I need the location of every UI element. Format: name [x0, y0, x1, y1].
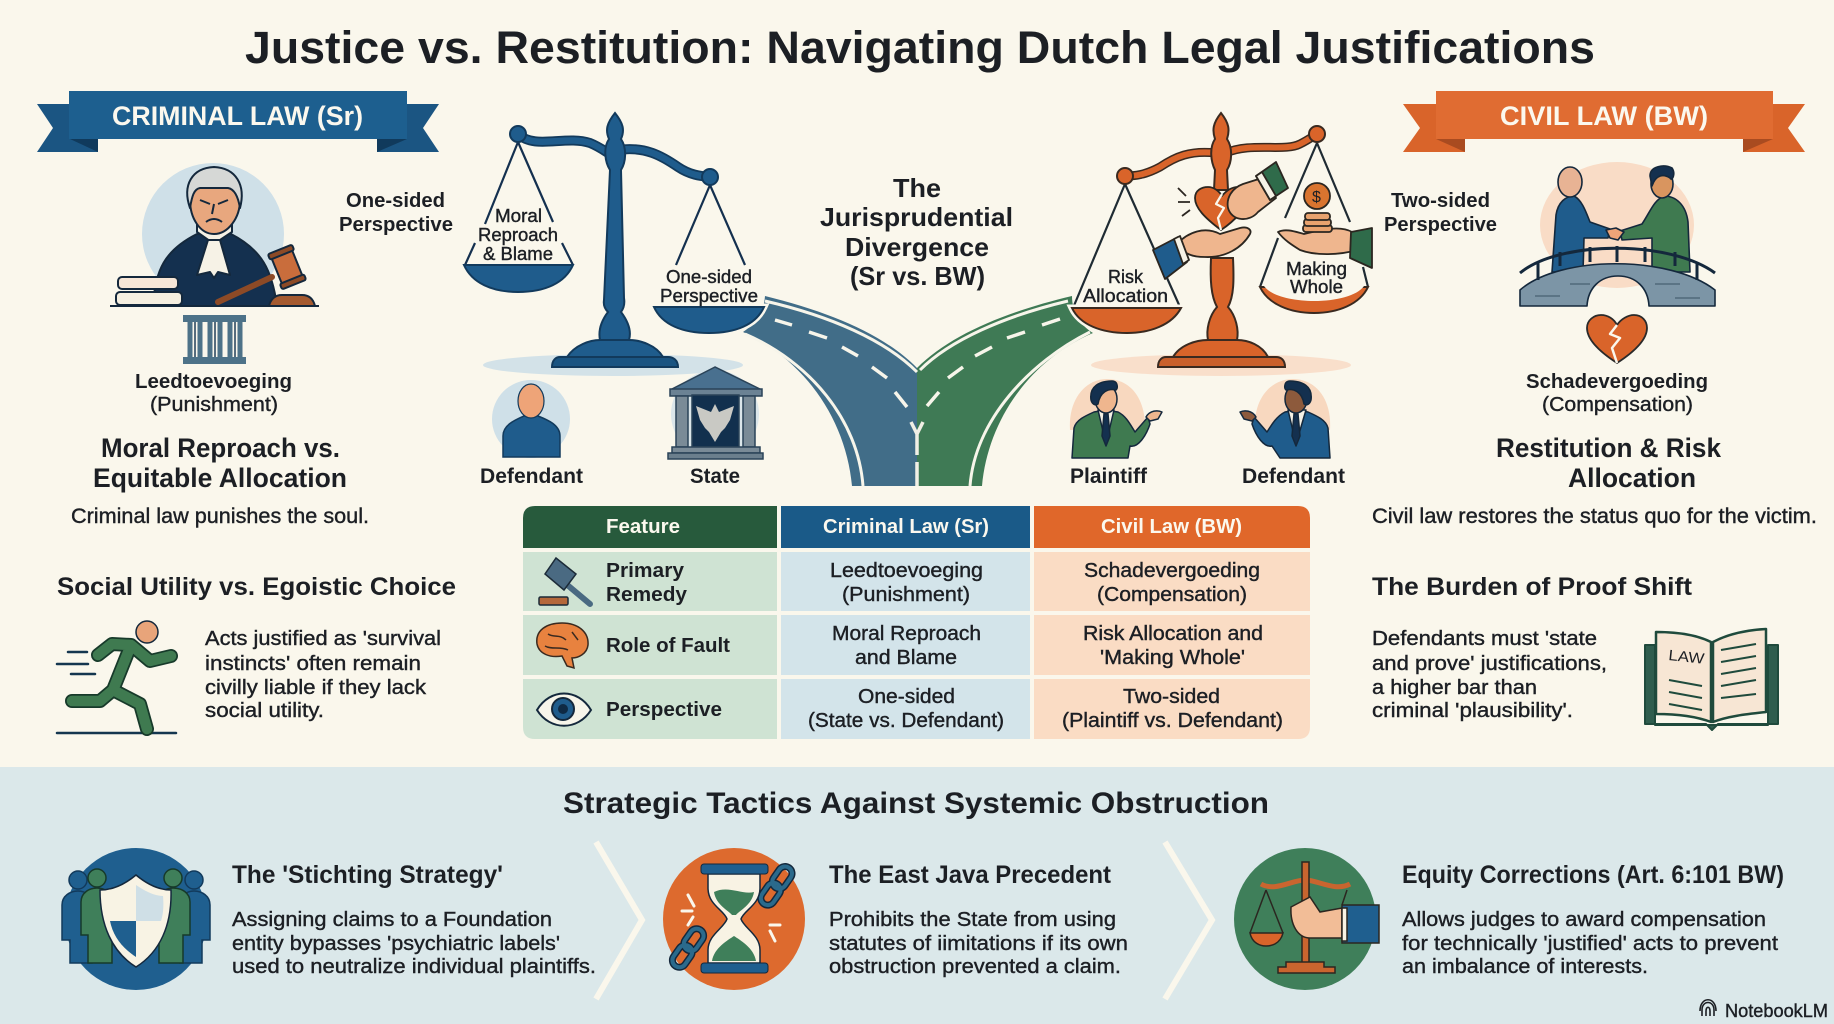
- table row: role of fault: [523, 615, 1310, 675]
- icon: handshake on bridge: [1520, 162, 1715, 306]
- label: Leedtoevoeging (Punishment): Leedtoevoeging: [135, 371, 292, 393]
- panel: criminal scale and parties: [464, 113, 764, 488]
- table row: perspective: Perspective: [606, 699, 722, 721]
- label: moral reproach and blame: Reproach: [478, 225, 558, 245]
- banner: criminal law: [37, 91, 439, 152]
- table header row: Feature: [606, 516, 680, 538]
- text: equity corrections: Equity Corrections (Art. 6:101 BW): [1402, 861, 1784, 889]
- text: survival instincts: instincts' often remain: [205, 653, 421, 675]
- text: stichting strategy: entity bypasses 'psychiatric labels': [232, 932, 560, 955]
- text: stichting strategy: used to neutralize individual plaintiffs.: [232, 955, 596, 978]
- icon: hands with broken heart and coins: [1153, 162, 1372, 279]
- text: stichting strategy: The 'Stichting Strategy': [232, 861, 503, 889]
- icon: blue balance scale: [464, 113, 764, 376]
- text: defendants must state and prove: Defendants must 'state: [1372, 628, 1597, 650]
- table row: role of fault: Role of Fault: [606, 635, 730, 657]
- label: defendant: Defendant: [480, 465, 583, 488]
- label: Schadevergoeding (Compensation): Schadevergoeding: [1526, 371, 1708, 393]
- text: defendants must state and prove: a higher bar than: [1372, 677, 1537, 699]
- text: equity corrections: for technically 'justified' acts to prevent: [1402, 932, 1778, 955]
- heading: strategic tactics: Strategic Tactics Against Systemic Obstruction: [563, 787, 1269, 820]
- table row: perspective: (Plaintiff vs. Defendant): [1062, 710, 1283, 732]
- text: equity corrections: an imbalance of interests.: [1402, 955, 1648, 978]
- icon: defendant: [492, 380, 570, 458]
- table row: role of fault: 'Making Whole': [1100, 647, 1245, 669]
- icon: state building with eagle: [668, 367, 763, 459]
- panel: strategic tactics band: [0, 767, 1834, 1024]
- heading: the jurisprudential divergence: Divergence: [845, 232, 989, 262]
- text: east java precedent: The East Java Precedent: [829, 861, 1112, 889]
- label: Schadevergoeding (Compensation): (Compensation): [1542, 394, 1693, 416]
- icon: eye: [537, 694, 591, 726]
- text: east java precedent: statutes of iimitations if its own: [829, 932, 1128, 955]
- icon: hands with broken heart and coins: $: [1312, 189, 1321, 206]
- text: criminal law punishes the soul: Criminal law punishes the soul.: [71, 505, 369, 528]
- table row: primary remedy: (Punishment): [842, 584, 970, 606]
- table row: primary remedy: Remedy: [606, 584, 688, 606]
- label: civil defendant: Defendant: [1242, 465, 1345, 488]
- heading: the jurisprudential divergence: [820, 173, 1013, 291]
- table row: perspective: (State vs. Defendant): [808, 710, 1004, 732]
- heading: Moral Reproach vs. Equitable Allocation: Moral Reproach vs.: [101, 433, 340, 463]
- label: two-sided perspective: Perspective: [1384, 214, 1497, 236]
- icon: prison bars: [183, 315, 246, 364]
- road: diverging paths: [743, 296, 1093, 486]
- label: one-sided perspective: One-sided: [346, 190, 445, 212]
- icon: orange balance scale: [1072, 113, 1368, 376]
- table row: role of fault: and Blame: [855, 647, 957, 669]
- table row: primary remedy: [523, 552, 1310, 611]
- table row: primary remedy: (Compensation): [1097, 584, 1247, 606]
- label: risk allocation: [1083, 267, 1168, 306]
- label: making whole: Making: [1286, 259, 1347, 279]
- label: risk allocation: Allocation: [1083, 286, 1168, 306]
- label: making whole: Whole: [1290, 277, 1343, 297]
- heading: Moral Reproach vs. Equitable Allocation: [93, 433, 347, 493]
- panel: comparison table: [523, 506, 1310, 739]
- label: moral reproach and blame: [478, 206, 558, 264]
- icon: gavel: [539, 558, 590, 605]
- table row: perspective: [523, 679, 1310, 739]
- banner: civil law: [1403, 91, 1805, 152]
- arrow: chevron two: [1165, 842, 1212, 999]
- icon: judge with books and gavel: [110, 163, 319, 306]
- text: east java precedent: [829, 861, 1128, 978]
- panel: criminal law column: [37, 91, 456, 733]
- heading: restitution and risk allocation: Allocation: [1568, 463, 1696, 493]
- text: survival instincts: social utility.: [205, 700, 324, 722]
- heading: the jurisprudential divergence: (Sr vs. BW): [850, 261, 985, 291]
- panel: civil scale and parties: [1070, 113, 1372, 488]
- icon: running figure: [57, 621, 176, 733]
- banner: civil law: CIVIL LAW (BW): [1500, 101, 1708, 131]
- icon: hand holding scale: [1234, 848, 1379, 990]
- label: state: State: [690, 465, 740, 488]
- heading: Social Utility vs. Egoistic Choice: Social Utility vs. Egoistic Choice: [57, 573, 456, 601]
- arrow: chevron one: [596, 842, 642, 999]
- table row: role of fault: Moral Reproach: [832, 623, 981, 645]
- label: Leedtoevoeging (Punishment): [135, 371, 292, 416]
- text: survival instincts: civilly liable if they lack: [205, 677, 427, 699]
- icon: shield with group: [62, 848, 210, 990]
- text: defendants must state and prove: [1372, 628, 1607, 722]
- heading: the jurisprudential divergence: Jurisprudential: [820, 202, 1013, 232]
- heading: the jurisprudential divergence: The: [893, 173, 941, 203]
- table header row: Civil Law (BW): [1101, 516, 1242, 538]
- logo: NotebookLM: NotebookLM: [1725, 1001, 1828, 1021]
- label: moral reproach and blame: Moral: [495, 206, 542, 226]
- text: survival instincts: Acts justified as 'survival: [205, 628, 441, 650]
- icon: open law book: [1645, 629, 1778, 730]
- text: civil law restores the status quo: Civil law restores the status quo for the victim.: [1372, 505, 1817, 528]
- text: east java precedent: Prohibits the State from using: [829, 908, 1116, 931]
- label: moral reproach and blame: & Blame: [483, 244, 553, 264]
- heading: restitution and risk allocation: Restitution & Risk: [1496, 433, 1722, 463]
- text: stichting strategy: Assigning claims to a Foundation: [232, 908, 552, 931]
- text: equity corrections: Allows judges to award compensation: [1402, 908, 1766, 931]
- table header row: [523, 506, 1310, 548]
- icon: broken heart: [1587, 315, 1647, 363]
- heading: Moral Reproach vs. Equitable Allocation: Equitable Allocation: [93, 463, 347, 493]
- label: one-sided perspective on pan: [660, 267, 758, 306]
- panel: civil law column: [1372, 91, 1817, 730]
- table row: primary remedy: Primary: [606, 560, 685, 582]
- label: one-sided perspective: [339, 190, 453, 236]
- text: stichting strategy: [232, 861, 596, 978]
- table row: role of fault: Risk Allocation and: [1083, 623, 1263, 645]
- text: east java precedent: obstruction prevented a claim.: [829, 955, 1121, 978]
- table row: primary remedy: Schadevergoeding: [1084, 560, 1260, 582]
- heading: the burden of proof shift: The Burden of Proof Shift: [1372, 573, 1693, 601]
- text: survival instincts: [205, 628, 441, 722]
- text: equity corrections: [1402, 861, 1784, 978]
- table row: perspective: One-sided: [858, 686, 955, 708]
- label: one-sided perspective on pan: Perspective: [660, 286, 758, 306]
- text: defendants must state and prove: and prove' justifications,: [1372, 653, 1607, 675]
- heading: restitution and risk allocation: [1496, 433, 1722, 493]
- label: Leedtoevoeging (Punishment): (Punishment): [150, 394, 278, 416]
- label: two-sided perspective: [1384, 190, 1497, 236]
- label: two-sided perspective: Two-sided: [1391, 190, 1490, 212]
- label: one-sided perspective: Perspective: [339, 214, 453, 236]
- icon: civil defendant: [1240, 379, 1330, 458]
- table row: primary remedy: Leedtoevoeging: [830, 560, 983, 582]
- label: one-sided perspective on pan: One-sided: [666, 267, 752, 287]
- label: making whole: [1286, 259, 1347, 297]
- icon: brain: [537, 623, 588, 668]
- icon: hourglass with broken chains: [663, 848, 805, 990]
- text: defendants must state and prove: criminal 'plausibility'.: [1372, 700, 1573, 722]
- banner: criminal law: CRIMINAL LAW (Sr): [112, 101, 363, 131]
- title: Justice vs. Restitution: Navigating Dutch Legal Justifications: [245, 22, 1595, 73]
- table header row: Criminal Law (Sr): [823, 516, 989, 538]
- table row: perspective: Two-sided: [1123, 686, 1220, 708]
- icon: plaintiff: [1070, 379, 1162, 458]
- label: risk allocation: Risk: [1108, 267, 1144, 287]
- label: Schadevergoeding (Compensation): [1526, 371, 1708, 416]
- icon: open law book: LAW: [1668, 647, 1706, 668]
- label: plaintiff: Plaintiff: [1070, 465, 1148, 488]
